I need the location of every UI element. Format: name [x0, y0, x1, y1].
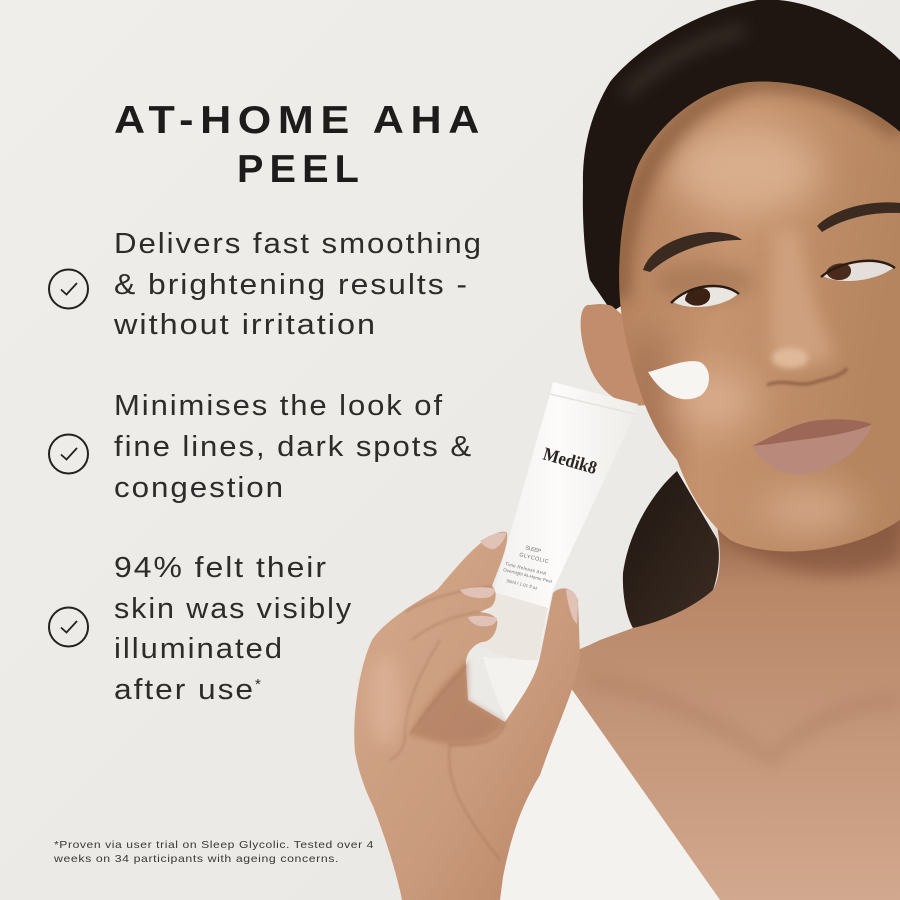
- ear: [581, 304, 646, 405]
- hand: [354, 532, 580, 900]
- product tube: [478, 382, 638, 660]
- lips: [752, 419, 872, 475]
- finger nails: [460, 533, 578, 626]
- benefit 3: [49, 552, 353, 706]
- tube crimp: [550, 394, 635, 414]
- footnote: *Proven via user trial on Sleep Glycolic. Tested over 4: [54, 839, 374, 851]
- title: AT-HOME AHA: [114, 99, 486, 142]
- footnote: weeks on 34 participants with ageing concerns.: [53, 853, 339, 865]
- finger creases: [390, 586, 505, 860]
- tube body: [478, 382, 638, 660]
- palm highlight: [369, 655, 401, 745]
- white top: [483, 657, 720, 900]
- cheek shadow: [628, 330, 672, 510]
- benefit 2 text: fine lines, dark spots &: [114, 431, 473, 463]
- product label text: [503, 545, 552, 591]
- chin highlight: [760, 488, 860, 532]
- left eyebrow: [643, 232, 742, 272]
- cheek highlight: [675, 370, 755, 430]
- collarbone shading: [590, 680, 900, 760]
- hair sheen: [625, 30, 745, 95]
- eye socket shadow: [655, 262, 755, 302]
- icon: check circle: [49, 270, 88, 308]
- photo: woman holding product: [354, 0, 900, 900]
- benefit 3 text: [114, 552, 353, 706]
- product label text: Overnight At-Home Peel: [503, 567, 552, 584]
- benefit 2 text: congestion: [114, 472, 285, 504]
- face: [619, 82, 900, 552]
- right eyebrow: [817, 202, 900, 232]
- footnote: [53, 839, 374, 865]
- tube cap: [478, 592, 548, 660]
- lower lip: [752, 425, 872, 475]
- icon: check circle: [49, 608, 88, 646]
- hair: [583, 0, 900, 312]
- left eye: [673, 287, 738, 307]
- icon: check circle: [49, 434, 88, 474]
- nose bridge: [771, 230, 835, 366]
- benefit 1 text: Delivers fast smoothing: [114, 228, 483, 260]
- palm shadow: [410, 660, 505, 745]
- nose tip highlight: [772, 348, 808, 368]
- benefit 2 text: Minimises the look of: [114, 390, 444, 422]
- product label text: 30ml / 1.01 fl oz: [506, 578, 539, 591]
- cream swatch: [648, 361, 709, 399]
- brand name: Medik8: [541, 445, 599, 479]
- forehead highlight: [670, 125, 820, 215]
- benefit 2 text: [114, 390, 473, 504]
- benefit 3 text: illuminated: [114, 633, 284, 665]
- benefit 3 text: after use: [114, 674, 255, 706]
- title: PEEL: [237, 148, 365, 191]
- benefit 2: [49, 390, 473, 504]
- neck and chest: [566, 500, 900, 900]
- benefit 1 text: without irritation: [113, 309, 377, 341]
- neck shadow: [720, 515, 900, 574]
- product label text: SLEEP: [525, 545, 542, 555]
- hair ponytail: [623, 471, 719, 628]
- nose underside: [767, 368, 847, 385]
- face base: [619, 82, 900, 552]
- benefit 3 text: 94% felt their: [114, 552, 328, 584]
- hairline shadow: [620, 82, 900, 300]
- right eye: [823, 262, 893, 281]
- title: [114, 99, 486, 191]
- benefit 1 text: & brightening results -: [114, 269, 469, 301]
- benefit 1: [49, 228, 483, 341]
- benefit 3 text: *: [255, 676, 263, 693]
- product label text: GLYCOLIC: [519, 552, 549, 565]
- benefit 3 text: skin was visibly: [114, 593, 353, 625]
- product label text: Time Release AHA: [505, 561, 547, 576]
- benefit 1 text: [113, 228, 483, 341]
- upper lip: [752, 419, 872, 446]
